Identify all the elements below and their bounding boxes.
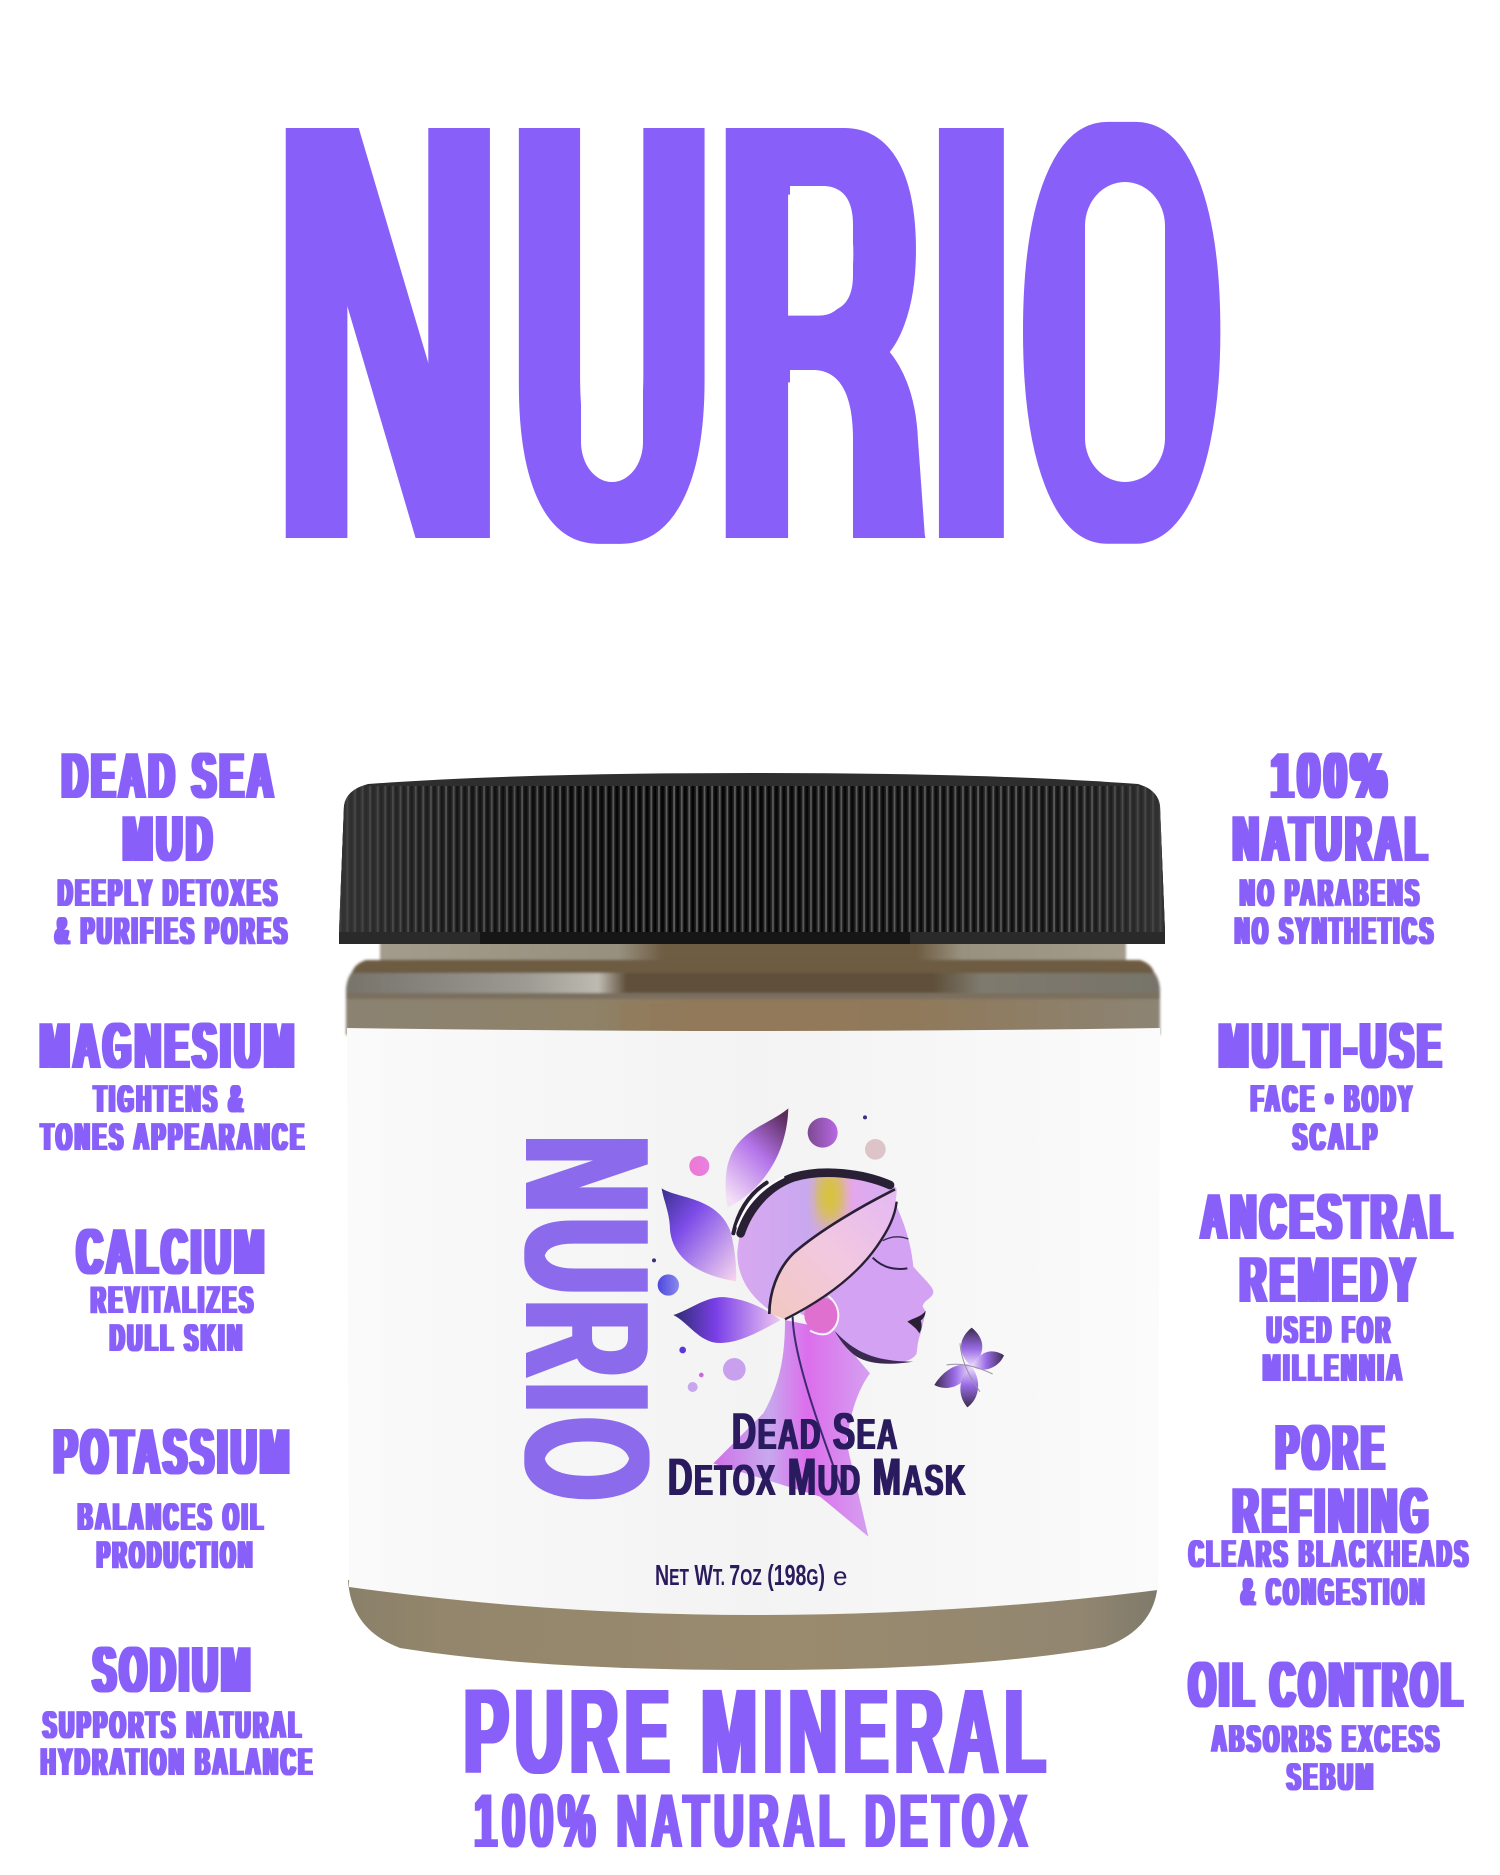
benefit: pore refining bbox=[1189, 1411, 1471, 1614]
butterfly bbox=[934, 1328, 1004, 1407]
jaw line bbox=[834, 1331, 913, 1364]
description: tightens and tones bbox=[41, 1078, 307, 1159]
sub-tagline: 100% natural detox: 100% NATURAL DETOX bbox=[474, 1779, 1032, 1864]
description: deeply detoxes: & PURIFIES PORES bbox=[55, 910, 290, 953]
description: supports natural hydration bbox=[41, 1704, 315, 1784]
neck and scarf bbox=[713, 1320, 870, 1537]
description: revitalizes bbox=[91, 1279, 256, 1360]
leaf left bbox=[662, 1188, 736, 1281]
wrap band bbox=[769, 1188, 897, 1319]
heading: 100% natural bbox=[1233, 739, 1431, 875]
jar shoulder and visible mud bbox=[346, 960, 1160, 1035]
leaf lower bbox=[673, 1297, 781, 1343]
description: absorbs excess sebum: SEBUM bbox=[1287, 1756, 1376, 1799]
benefit: dead sea mud bbox=[55, 739, 290, 953]
description: deeply detoxes bbox=[55, 872, 290, 953]
title: NURIO: I bbox=[930, 0, 1013, 664]
net weight: NET WT. 7OZ (198G) bbox=[655, 1560, 825, 1592]
description: balances oil bbox=[78, 1496, 266, 1577]
wrap highlight bbox=[819, 1167, 841, 1227]
head wrap bbox=[737, 1170, 897, 1319]
description: face body scalp: SCALP bbox=[1293, 1116, 1380, 1159]
earring bbox=[804, 1296, 839, 1334]
heading: 100% natural: 100% bbox=[1271, 739, 1391, 812]
product name: DEAD SEA bbox=[732, 1403, 899, 1461]
benefit: sodium bbox=[41, 1633, 315, 1784]
jar bottom mud bbox=[348, 1580, 1158, 1670]
heading: potassium: POTASSIUM bbox=[54, 1415, 293, 1488]
net weight: e bbox=[833, 1561, 847, 1591]
heading: ancestral remedy bbox=[1201, 1180, 1456, 1316]
benefit: potassium bbox=[54, 1415, 293, 1577]
description: no parabens bbox=[1235, 872, 1436, 953]
title: NURIO: R bbox=[718, 0, 920, 665]
decorative dots bbox=[652, 1115, 886, 1392]
benefit: calcium bbox=[77, 1215, 268, 1360]
jar lid bbox=[335, 770, 1170, 948]
description: supports natural hydration: SUPPORTS NATURAL bbox=[43, 1704, 304, 1747]
product jar bbox=[335, 770, 1170, 1670]
heading: dead sea mud: MUD bbox=[123, 802, 216, 875]
benefit: 100% natural bbox=[1233, 739, 1436, 953]
illustration: woman in head wrap bbox=[652, 1108, 1004, 1537]
description: supports natural hydration: HYDRATION BALANCE bbox=[41, 1741, 315, 1784]
description: absorbs excess sebum bbox=[1212, 1718, 1442, 1799]
description: balances oil: BALANCES OIL bbox=[78, 1496, 266, 1539]
heading: dead sea mud bbox=[62, 739, 277, 875]
description: revitalizes: DULL SKIN bbox=[110, 1317, 245, 1360]
lips bbox=[907, 1311, 926, 1333]
heading: sodium: SODIUM bbox=[93, 1633, 254, 1706]
title: NURIO: N bbox=[276, 0, 500, 665]
benefit: multi-use bbox=[1219, 1009, 1445, 1159]
face bbox=[800, 1203, 933, 1364]
heading: pore refining bbox=[1233, 1411, 1432, 1547]
wrap dark stripes bbox=[733, 1173, 890, 1233]
description: tightens and tones: TIGHTENS & bbox=[94, 1078, 246, 1121]
heading: calcium: CALCIUM bbox=[77, 1215, 268, 1288]
heading: pore refining: PORE bbox=[1276, 1411, 1388, 1484]
leaf top bbox=[726, 1108, 788, 1207]
heading: magnesium: MAGNESIUM bbox=[40, 1009, 298, 1082]
label logo: vertical NURIO: NURIO bbox=[488, 1136, 686, 1506]
product name bbox=[668, 1403, 967, 1507]
title: NURIO bbox=[276, 0, 1217, 665]
right column of benefits bbox=[1189, 739, 1471, 1799]
closed eye bbox=[873, 1258, 907, 1269]
benefit: ancestral remedy bbox=[1201, 1180, 1456, 1390]
description: revitalizes: REVITALIZES bbox=[91, 1279, 256, 1322]
label bbox=[347, 1028, 1160, 1615]
benefit: magnesium bbox=[40, 1009, 307, 1159]
jar neck bbox=[380, 940, 1126, 964]
description: balances oil: PRODUCTION bbox=[97, 1534, 255, 1577]
product name: DETOX MUD MASK bbox=[668, 1448, 967, 1507]
heading: dead sea mud: DEAD SEA bbox=[62, 739, 277, 812]
eyebrow bbox=[883, 1237, 908, 1241]
tagline: pure mineral: PURE MINERAL bbox=[464, 1663, 1052, 1799]
description: used for millennia bbox=[1263, 1309, 1405, 1390]
description: clears blackheads bbox=[1189, 1533, 1471, 1614]
title: NURIO: U bbox=[514, 0, 710, 665]
description: deeply detoxes: DEEPLY DETOXES bbox=[58, 872, 280, 915]
benefit: oil control bbox=[1189, 1648, 1466, 1799]
title: NURIO: O bbox=[1027, 0, 1217, 665]
description: tightens and tones: TONES APPEARANCE bbox=[41, 1116, 307, 1159]
description: face body scalp bbox=[1251, 1078, 1415, 1159]
left column of benefits bbox=[40, 739, 315, 1784]
wrap band edge lines bbox=[769, 1189, 897, 1493]
